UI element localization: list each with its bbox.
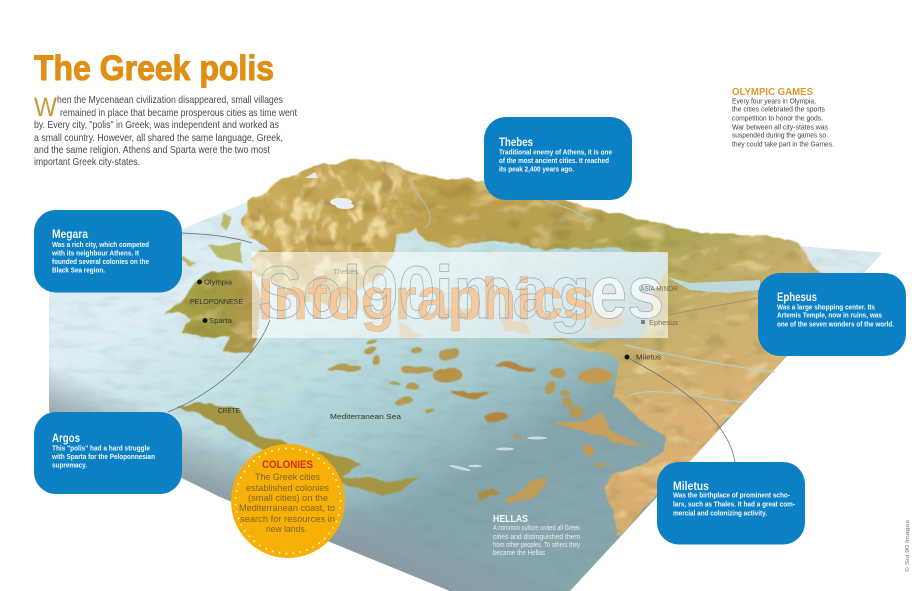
panel: Hellas: HELLAS [493, 514, 528, 525]
intro paragraph [34, 92, 297, 168]
panel: Olympic Games: War between all city-states was [732, 122, 828, 132]
panel: Ephesus: Was a large shopping center. Its [777, 302, 875, 312]
panel: Argos: This "polis" had a hard struggle [52, 444, 150, 452]
panel: Thebes [484, 117, 632, 200]
intro paragraph: a small country. However, all shared the same language, Greek, [34, 133, 283, 144]
label: Peloponnese: PELOPONNESE [190, 297, 243, 306]
panel: Olympic Games: OLYMPIC GAMES [732, 86, 813, 98]
panel: Thebes: of the most ancient cities. It reached [499, 156, 609, 165]
leader lines [168, 233, 758, 462]
image credit: © Sol 90 Images [904, 519, 911, 572]
panel: Hellas: A common culture united all Greek [493, 525, 580, 532]
panel: Argos: Argos [52, 433, 80, 445]
panel: Olympic Games: suspended during the games so [732, 130, 826, 140]
callout: Colonies [231, 444, 345, 558]
land: Peloponnese [165, 272, 262, 350]
panel: Argos [34, 412, 182, 494]
panel: Miletus: mercial and colonizing activity. [673, 508, 767, 518]
callout: Colonies: The Greek cities [255, 472, 320, 483]
intro paragraph: remained in place that became prosperous cities as time went [60, 108, 297, 119]
intro paragraph: and the same religion. Athens and Sparta were the two most [34, 145, 270, 156]
panel: Megara: Black Sea region. [52, 266, 105, 274]
panel: Argos: supremacy. [52, 460, 87, 470]
terrain relief texture [184, 160, 810, 535]
callout: Colonies: COLONIES [262, 459, 313, 471]
intro paragraph: important Greek city-states. [34, 157, 140, 168]
sea surface [49, 202, 882, 591]
intro paragraph: by. Every city, "polis" in Greek, was independent and worked as [34, 120, 279, 131]
intro paragraph: hen the Mycenaean civilization disappeared, small villages [57, 95, 283, 106]
panel: Ephesus: one of the seven wonders of the world. [777, 320, 894, 328]
panel: Megara: Was a rich city, which competed [52, 240, 149, 249]
panel: Megara: Megara [52, 229, 89, 241]
panel: Olympic Games: they could take part in the Games. [732, 140, 834, 148]
label: Miletus: Miletus [636, 352, 661, 362]
panel: Ephesus [758, 273, 906, 356]
callout: Colonies: search for resources in [240, 514, 335, 525]
watermark text: Infographics [258, 267, 594, 332]
panel: Hellas: from other peoples. To others they [493, 542, 580, 549]
panel: Miletus: lars, such as Thales. It had a great com- [673, 500, 795, 508]
label: Miletus [624, 352, 661, 362]
panel: Thebes: its peak 2,400 years ago. [499, 164, 574, 174]
panel: Megara [34, 210, 182, 292]
callout: Colonies: (small cities) on the [248, 493, 328, 504]
label: Sparta: Sparta [209, 316, 233, 325]
panel: Megara: founded several colonies on the [52, 257, 149, 266]
watermark text: Sol90images [258, 251, 664, 334]
panel: Miletus: Was the birthplace of prominent scho- [673, 490, 790, 500]
panel: Hellas: cities and distinguished them [493, 534, 580, 541]
label: Thebes: Thebes [333, 267, 358, 276]
Aegean and Mediterranean islands [330, 305, 650, 505]
panel: Argos: with Sparta for the Peloponnesian [51, 452, 155, 461]
watermark band [252, 252, 668, 338]
land: northern Greece and Asia Minor [242, 160, 840, 537]
title: The Greek polis [34, 49, 274, 88]
panel: Ephesus: Artemis Temple, now in ruins, was [777, 310, 882, 320]
panel: Olympic Games: competition to honor the gods. [732, 114, 823, 122]
lakes and rivers [305, 172, 775, 402]
panel: Miletus: Miletus [673, 481, 709, 493]
label: Mediterranean Sea: Mediterranean Sea [330, 412, 402, 421]
callout: Colonies: Mediterranean coast, to [239, 503, 335, 514]
panel: Thebes: Traditional enemy of Athens, it is one [499, 148, 612, 156]
panel: Olympic Games [732, 86, 834, 148]
white sparkles on the sea [449, 436, 547, 472]
land: western coastal patches [181, 213, 242, 265]
label: Ephesus: Ephesus [649, 318, 678, 327]
panel: Olympic Games: Every four years in Olympia, [732, 96, 816, 106]
map place labels [190, 267, 679, 421]
island: Crete [177, 400, 420, 493]
panel: Megara: with its neighbour Athens. It [51, 248, 139, 258]
callout: Colonies: new lands. [266, 524, 307, 535]
label: Olympia: Olympia [204, 278, 233, 286]
land masses, islands and relief [164, 158, 824, 536]
panel: Hellas [493, 514, 580, 557]
panel: Olympic Games: the cities celebrated the sports [732, 104, 825, 114]
mountain ridges [230, 159, 424, 310]
panel: Thebes: Thebes [499, 137, 533, 149]
panel: Hellas: became the Hellas [493, 550, 545, 557]
label: Asia Minor: ASIA MINOR [640, 284, 679, 293]
3D map of Greece and the Aegean [49, 158, 882, 591]
label: Crete: CRETE [218, 406, 240, 415]
drop cap: W [34, 92, 57, 122]
callout: Colonies: established colonies [246, 483, 329, 494]
panel: Ephesus: Ephesus [777, 292, 817, 304]
panel: Miletus [657, 462, 805, 544]
